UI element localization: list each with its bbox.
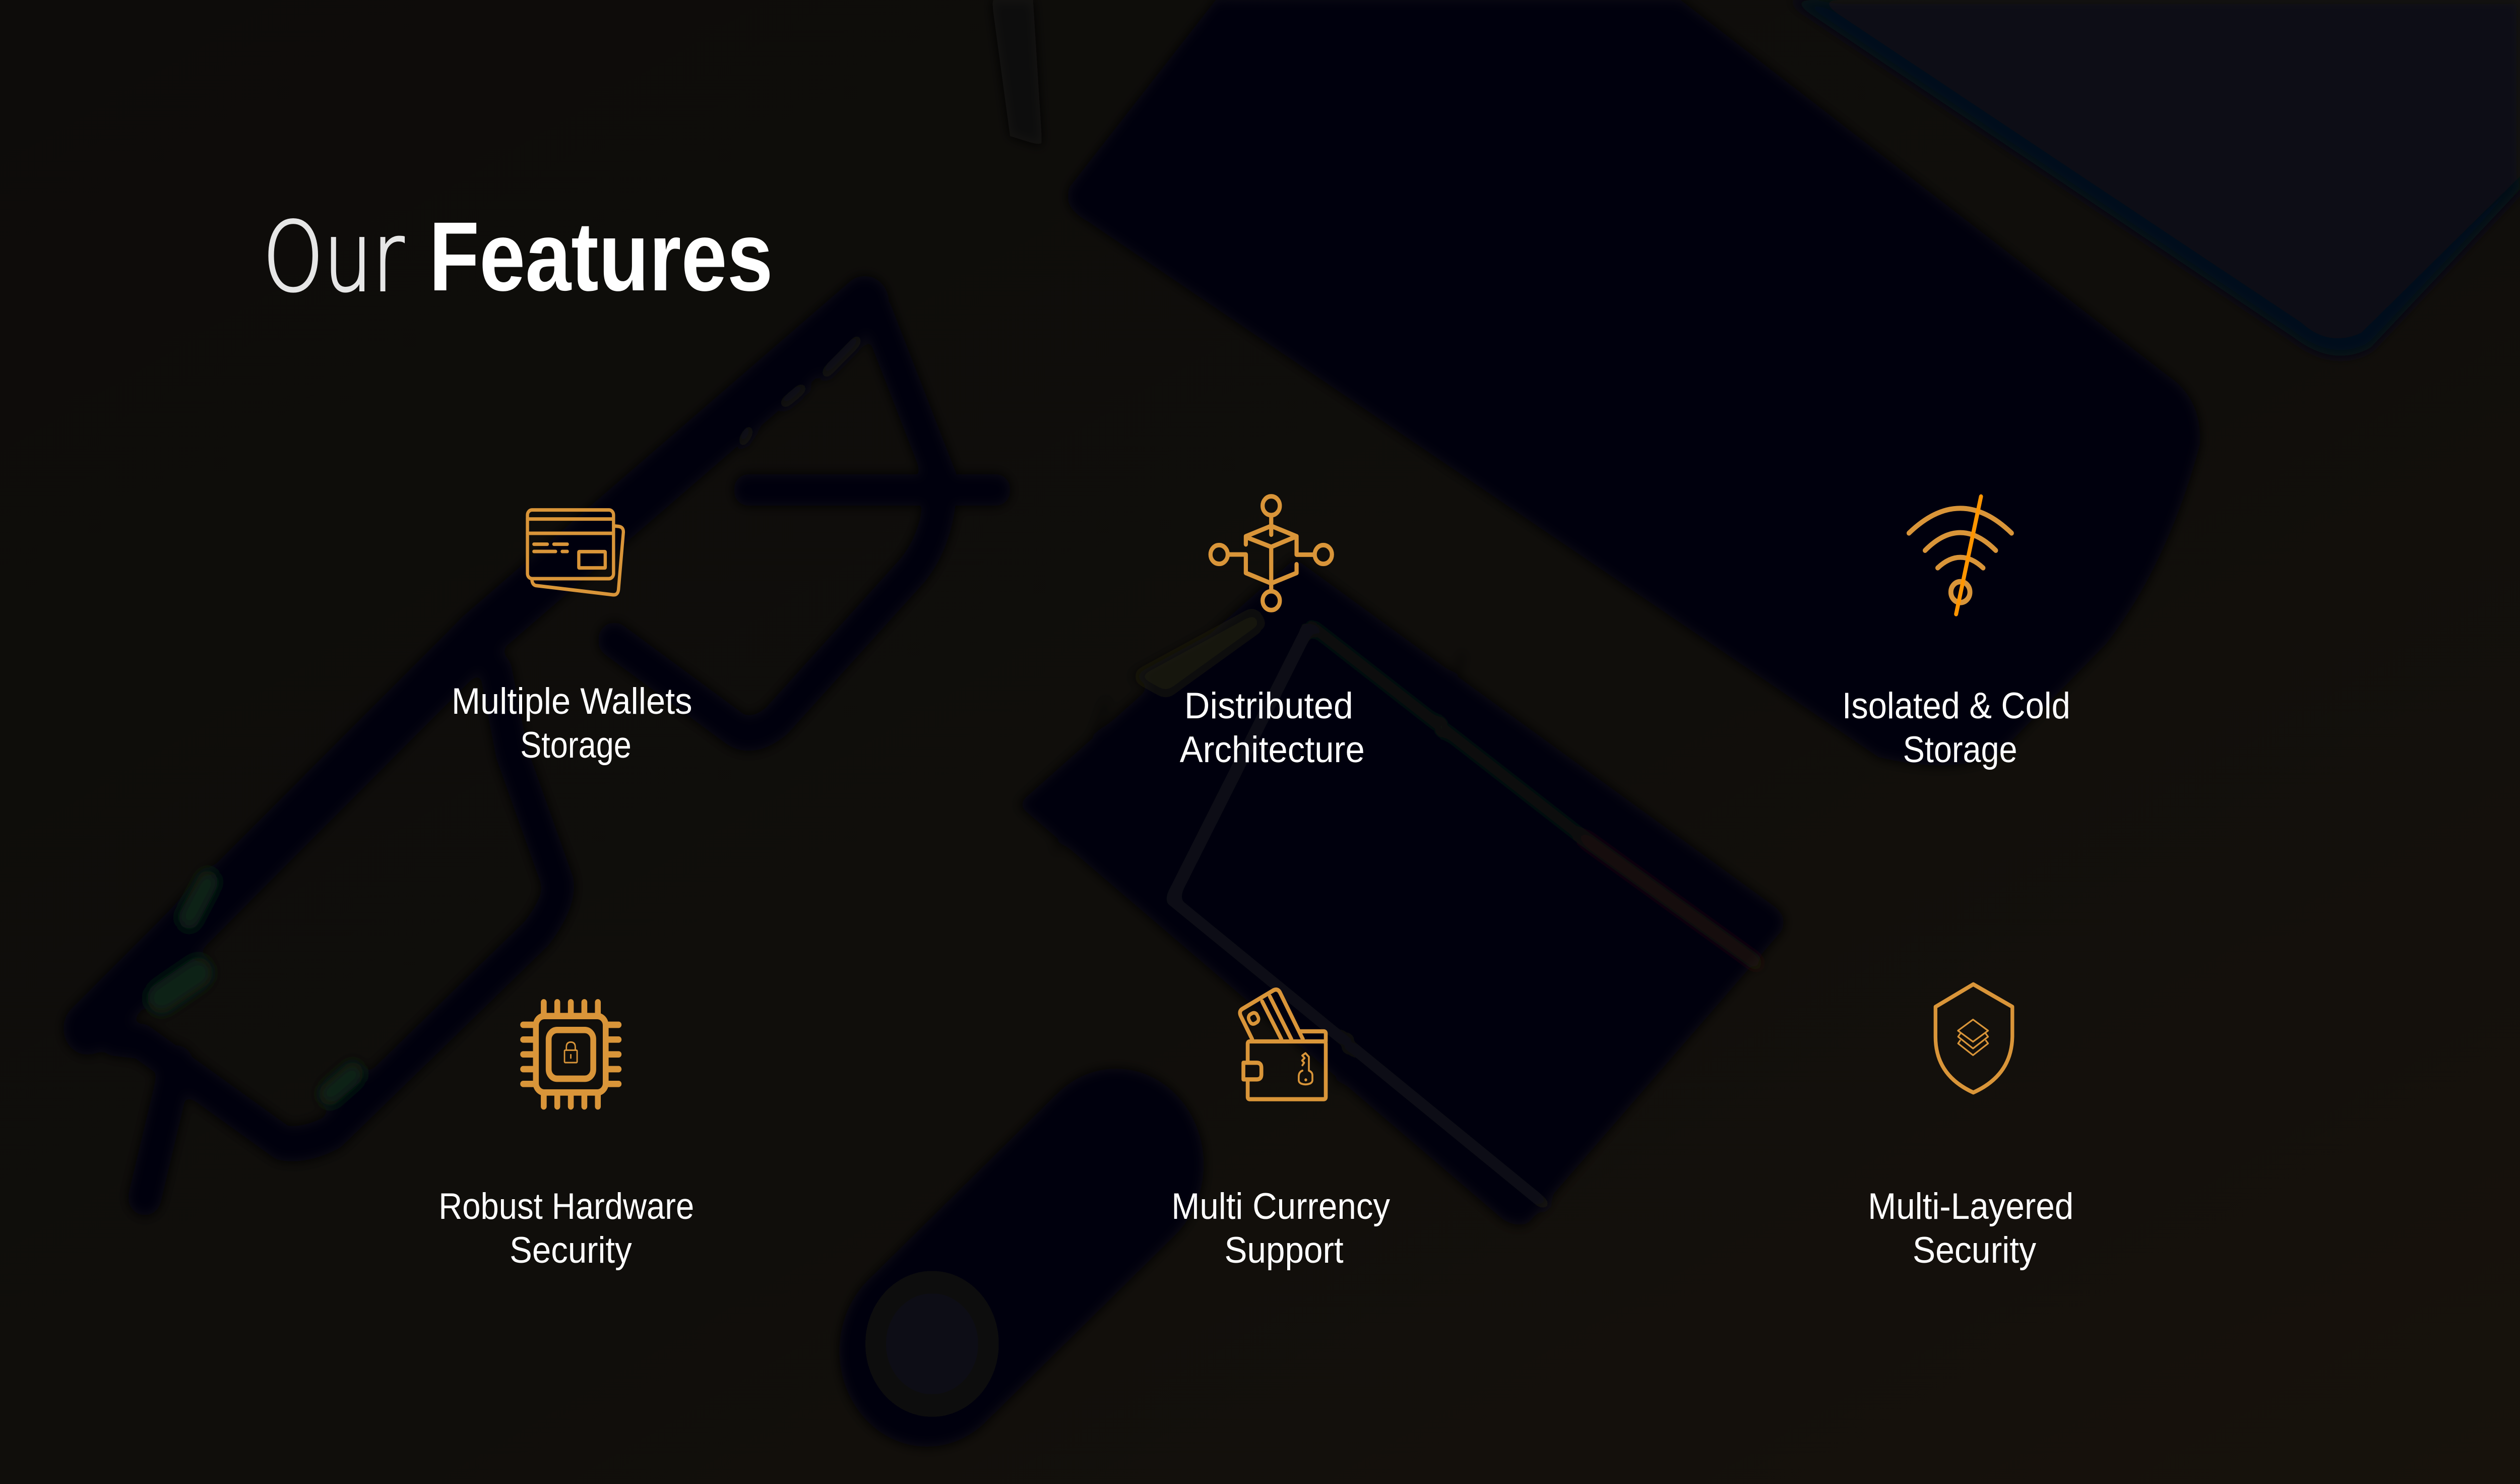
- feature: Multi Currency Support: [1171, 990, 1390, 1271]
- label: Isolated & Cold Storage: [1842, 685, 2070, 770]
- title: Our Features: Our: [263, 202, 404, 313]
- label: Multi Currency Support: Support: [1225, 1229, 1344, 1271]
- label: Multiple Wallets Storage: Multiple Wallets: [452, 681, 692, 722]
- label: Robust Hardware Security: Robust Hardware: [438, 1186, 694, 1227]
- glasses frame: [88, 302, 996, 1197]
- label: Distributed Architecture: Architecture: [1180, 729, 1365, 770]
- label: Multi Currency Support: [1171, 1186, 1390, 1271]
- label: Multi Currency Support: Multi Currency: [1171, 1186, 1390, 1227]
- label: Distributed Architecture: Distributed: [1184, 685, 1353, 726]
- label: Robust Hardware Security: [438, 1186, 694, 1271]
- icon: distributed cube network: [1211, 497, 1332, 610]
- key fob: [927, 1164, 1116, 1351]
- icon: chip with padlock: [523, 1002, 618, 1106]
- label: Multi-Layered Security: [1868, 1186, 2073, 1271]
- feature: Multiple Wallets Storage: [452, 510, 692, 766]
- label: Isolated & Cold Storage: Isolated & Cold: [1842, 685, 2070, 726]
- label: Multiple Wallets Storage: [452, 681, 692, 766]
- feature: Isolated & Cold Storage: [1842, 497, 2070, 770]
- feature: Robust Hardware Security: [438, 1002, 694, 1271]
- icon: credit cards: [528, 510, 623, 595]
- title: Our Features: [263, 202, 773, 313]
- icon: shield with layers: [1935, 984, 2012, 1092]
- feature: Multi-Layered Security: [1868, 984, 2073, 1271]
- label: Robust Hardware Security: Security: [510, 1229, 632, 1271]
- label: Multi-Layered Security: Multi-Layered: [1868, 1186, 2073, 1227]
- label: Multi-Layered Security: Security: [1913, 1229, 2036, 1271]
- icon: crossed wifi signal: [1909, 497, 2011, 614]
- label: Isolated & Cold Storage: Storage: [1903, 729, 2018, 770]
- title: Our Features: Features: [429, 202, 773, 312]
- icon: wallet with card and key: [1240, 990, 1326, 1099]
- label: Multiple Wallets Storage: Storage: [520, 724, 632, 766]
- label: Distributed Architecture: [1180, 685, 1365, 770]
- feature: Distributed Architecture: [1180, 497, 1365, 770]
